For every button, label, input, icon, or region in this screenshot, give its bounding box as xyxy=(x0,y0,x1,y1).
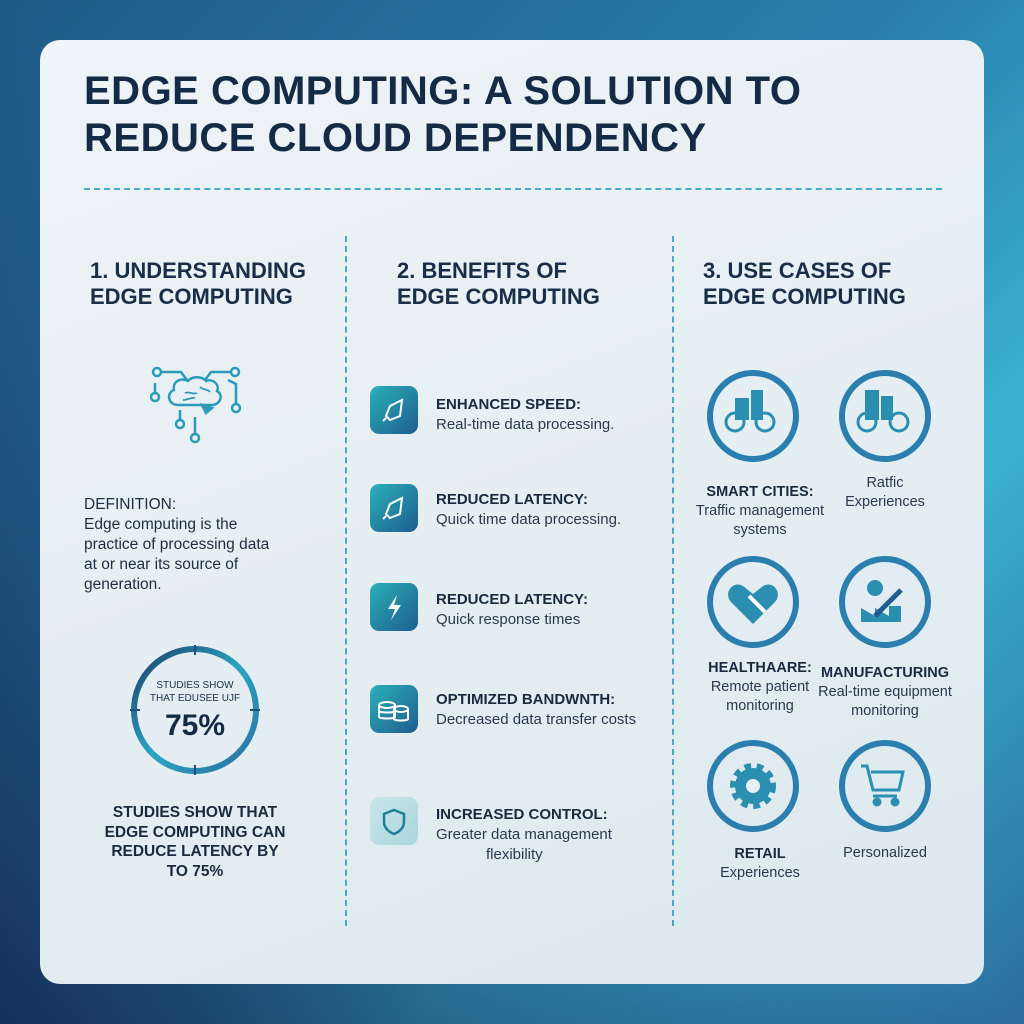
use case: smart cities: SMART CITIES: xyxy=(706,484,814,500)
use case: smart cities xyxy=(696,370,824,538)
text: Quick time data processing. xyxy=(436,511,621,528)
text: ENHANCED SPEED: xyxy=(436,396,581,413)
use case: manufacturing xyxy=(818,556,952,719)
ring stat: STUDIES SHOW xyxy=(156,680,234,691)
use case: retail: Experiences xyxy=(720,865,800,881)
use case: manufacturing: monitoring xyxy=(851,703,919,719)
use case: healthcare: HEALTHAARE: xyxy=(708,660,812,676)
column 1 heading xyxy=(90,258,306,309)
text: OPTIMIZED BANDWNTH: xyxy=(436,691,615,708)
use case: retail: RETAIL xyxy=(734,846,786,862)
title xyxy=(84,69,801,160)
benefit: control xyxy=(370,797,418,845)
use case: ratfic xyxy=(839,370,931,510)
text: INCREASED CONTROL: xyxy=(436,806,608,823)
use case: smart cities: Traffic management xyxy=(696,503,824,519)
definition text: at or near its source of xyxy=(84,556,238,573)
definition text: DEFINITION: xyxy=(84,496,176,513)
column 1 heading: EDGE COMPUTING xyxy=(90,284,293,309)
text: Real-time data processing. xyxy=(436,416,614,433)
use case: manufacturing: Real-time equipment xyxy=(818,684,952,700)
title: EDGE COMPUTING: A SOLUTION TO xyxy=(84,69,801,113)
definition text: Edge computing is the xyxy=(84,516,237,533)
ring stat xyxy=(130,645,260,775)
column 3 heading: 3. USE CASES OF xyxy=(703,258,891,283)
use case: healthcare: Remote patient xyxy=(711,679,809,695)
text: Quick response times xyxy=(436,611,580,628)
use case: personalized: Personalized xyxy=(843,845,927,861)
column 1 heading: 1. UNDERSTANDING xyxy=(90,258,306,283)
use case: ratfic: Experiences xyxy=(845,494,925,510)
definition text: practice of processing data xyxy=(84,536,269,553)
column 3 heading: EDGE COMPUTING xyxy=(703,284,906,309)
ring stat: THAT EDUSEE UJF xyxy=(150,693,240,704)
text: flexibility xyxy=(486,846,543,863)
column 3 heading xyxy=(703,258,906,309)
use case: personalized xyxy=(839,740,931,861)
title: REDUCE CLOUD DEPENDENCY xyxy=(84,116,707,160)
text: Greater data management xyxy=(436,826,612,843)
stat caption: EDGE COMPUTING CAN xyxy=(105,824,285,840)
benefit: bandwidth xyxy=(370,685,418,733)
benefit: latency bolt xyxy=(370,583,418,631)
use case: healthcare: monitoring xyxy=(726,698,794,714)
icon: brain network xyxy=(150,366,242,444)
column 2 heading xyxy=(397,258,600,309)
text: REDUCED LATENCY: xyxy=(436,591,588,608)
use case: smart cities: systems xyxy=(733,522,787,538)
column 2 heading: EDGE COMPUTING xyxy=(397,284,600,309)
ring stat: 75% xyxy=(165,709,225,742)
use case: manufacturing: MANUFACTURING xyxy=(821,665,949,681)
text: Decreased data transfer costs xyxy=(436,711,636,728)
stat caption: REDUCE LATENCY BY xyxy=(111,843,279,860)
definition text: generation. xyxy=(84,576,162,593)
stat caption xyxy=(105,804,285,880)
stat caption: TO 75% xyxy=(167,862,223,880)
definition text xyxy=(84,496,270,593)
use case: healthcare xyxy=(707,556,812,714)
benefit: enhanced speed xyxy=(370,386,418,434)
column 2 heading: 2. BENEFITS OF xyxy=(397,258,567,283)
benefit: reduced latency xyxy=(370,484,418,532)
stat caption: STUDIES SHOW THAT xyxy=(113,804,277,821)
text: REDUCED LATENCY: xyxy=(436,491,588,508)
use case: ratfic: Ratfic xyxy=(866,475,904,491)
use case: retail xyxy=(707,740,800,881)
